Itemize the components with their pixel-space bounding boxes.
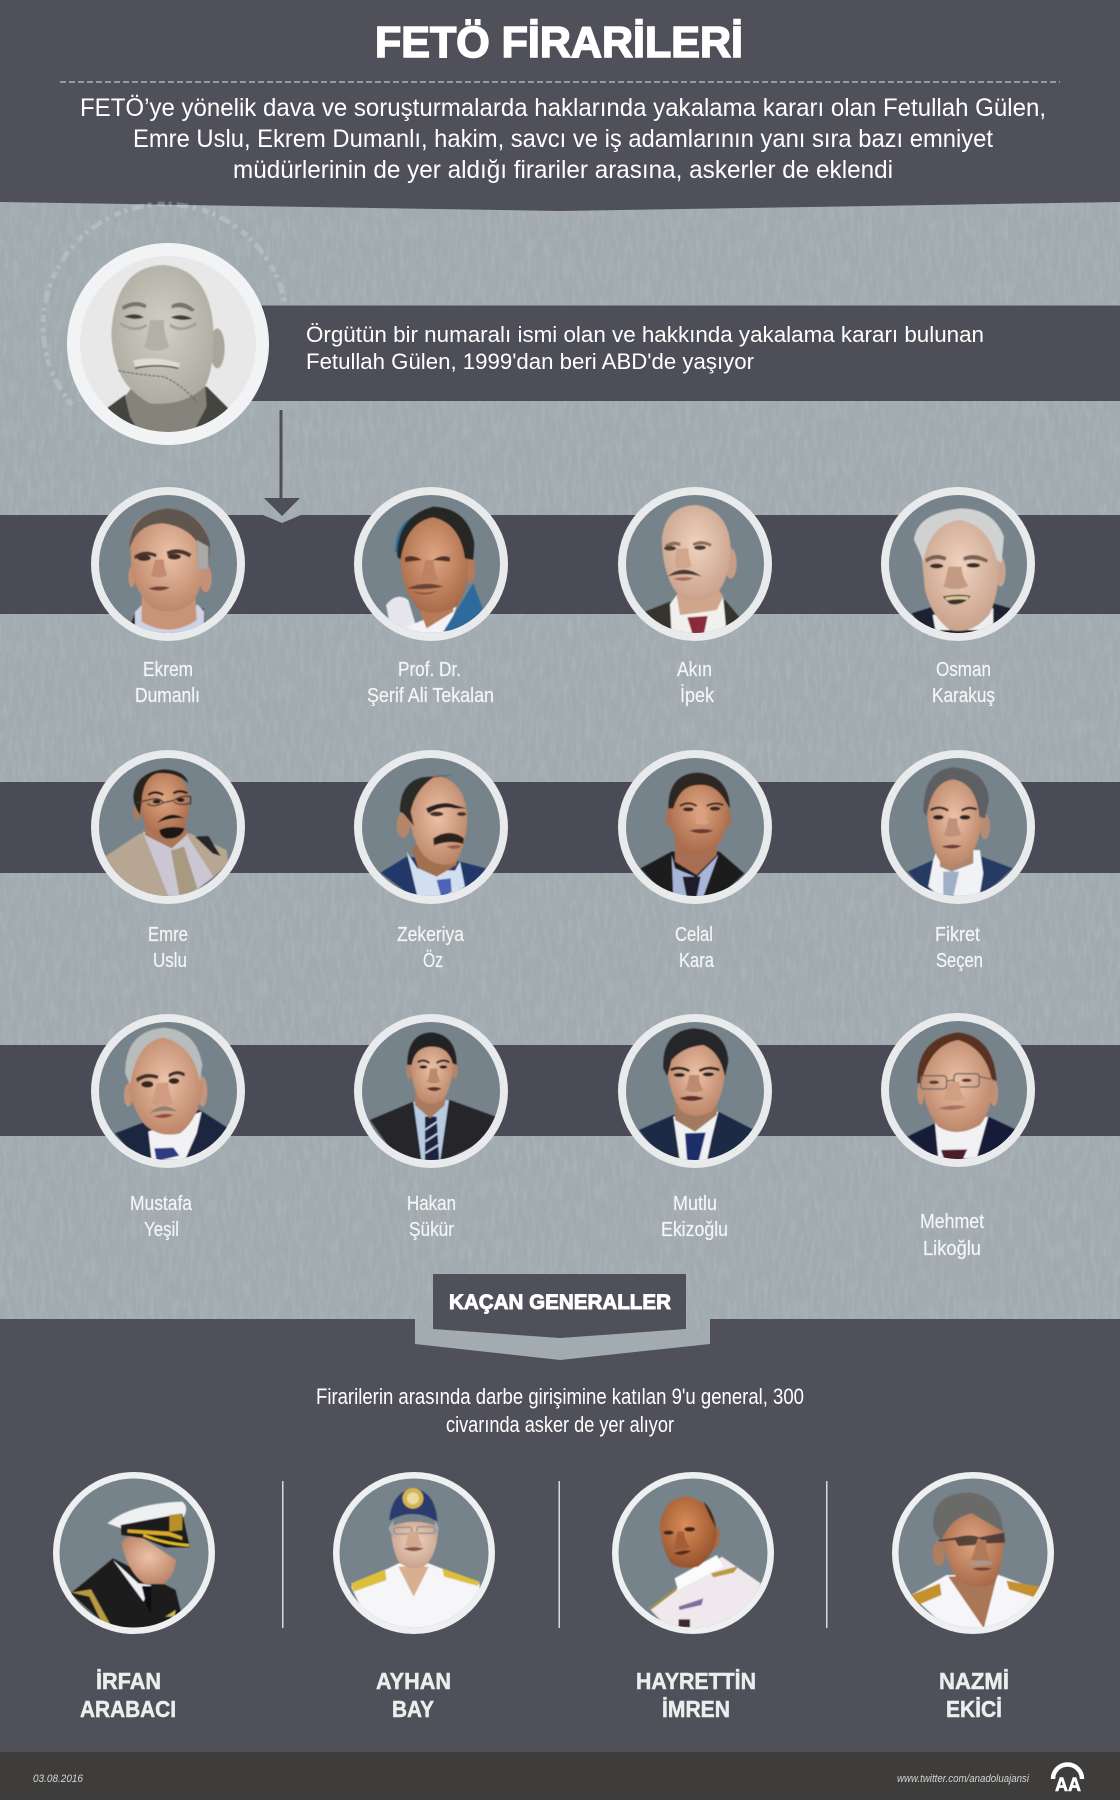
- names: row 2: Öz: [423, 950, 443, 972]
- footer link: www.twitter.com/anadoluajansi: [897, 1773, 1029, 1785]
- portrait: Fikret Seçen: [881, 750, 1035, 904]
- portrait: Mehmet Likoğlu: [881, 1013, 1035, 1167]
- general names: NAZMİ: [939, 1668, 1009, 1694]
- general names: İRFAN: [96, 1668, 161, 1694]
- icon: AA logo: AA: [1055, 1775, 1081, 1796]
- icon: AA logo: [1053, 1764, 1082, 1796]
- names: row 3: Mustafa: [130, 1193, 193, 1215]
- band: row 2: [0, 782, 1120, 873]
- names: row 3: Mehmet: [920, 1211, 984, 1233]
- intro text: müdürlerinin de yer aldığı firariler arasına, askerler de eklendi: [233, 156, 893, 184]
- band: row 1: [0, 515, 1120, 614]
- footer: [0, 1752, 1120, 1800]
- panel: Gülen band with text: [230, 306, 1120, 401]
- names: row 1: Osman: [936, 659, 991, 681]
- panel: header: [0, 0, 1120, 211]
- names: row 1: Ekrem: [143, 659, 193, 681]
- text: generals intro: Firarilerin arasında darbe girişimine katılan 9'u general, 300: [316, 1384, 804, 1409]
- portrait: Zekeriya Öz: [354, 750, 508, 904]
- names: row 3: Hakan: [407, 1193, 456, 1215]
- portrait: Mustafa Yeşil: [91, 1014, 245, 1168]
- panel: Gülen band with text: Fetullah Gülen, 1999'dan beri ABD'de yaşıyor: [306, 349, 754, 374]
- names: row 2: Zekeriya: [397, 924, 465, 946]
- portrait: Hakan Şükür: [354, 1014, 508, 1168]
- names: row 1: İpek: [680, 684, 715, 707]
- portrait: Mutlu Ekizoğlu: [618, 1014, 772, 1168]
- names: row 2: Emre: [148, 924, 188, 946]
- general names: İMREN: [662, 1696, 730, 1722]
- heading: Kaçan Generaller: KAÇAN GENERALLER: [449, 1291, 671, 1314]
- names: row 2: Kara: [679, 950, 715, 972]
- portrait: Ayhan Bay: [333, 1472, 495, 1634]
- general names: ARABACI: [80, 1696, 176, 1722]
- text: generals intro: [316, 1384, 804, 1437]
- arrow: [264, 410, 300, 516]
- title: FETÖ FİRARİLERİ: [375, 18, 743, 67]
- panel: textured grey background: [0, 195, 1120, 1330]
- names: row 1: Şerif Ali Tekalan: [367, 685, 494, 707]
- names: row 1: Prof. Dr.: [398, 659, 461, 681]
- names: row 1: [135, 659, 995, 707]
- names: row 2: Seçen: [936, 950, 983, 972]
- intro text: Emre Uslu, Ekrem Dumanlı, hakim, savcı ve iş adamlarının yanı sıra bazı emniyet: [133, 125, 993, 153]
- names: row 3: Mutlu: [673, 1193, 717, 1215]
- portrait: Celal Kara: [618, 750, 772, 904]
- names: row 1: Karakuş: [932, 685, 995, 707]
- intro text: [80, 94, 1046, 184]
- portrait: Nazmi Ekici: [892, 1472, 1054, 1634]
- names: row 2: Fikret: [935, 924, 980, 946]
- names: row 3: Yeşil: [144, 1219, 179, 1241]
- band: row 3: [0, 1045, 1120, 1136]
- names: row 1: Akın: [677, 659, 712, 681]
- intro text: FETÖ’ye yönelik dava ve soruşturmalarda haklarında yakalama kararı olan Fetullah Gülen,: [80, 94, 1046, 122]
- footer date: 03.08.2016: [33, 1773, 84, 1785]
- portrait: Osman Karakuş: [881, 487, 1035, 641]
- general names: EKİCİ: [946, 1696, 1002, 1722]
- portrait: Emre Uslu: [91, 750, 245, 904]
- names: row 3: Şükür: [409, 1219, 454, 1241]
- panel: Gülen band with text: Örgütün bir numaralı ismi olan ve hakkında yakalama kararı bulunan: [306, 322, 984, 347]
- general names: AYHAN: [376, 1668, 451, 1694]
- names: row 2: Uslu: [153, 950, 187, 972]
- names: row 2: [148, 924, 983, 972]
- names: row 1: Dumanlı: [135, 685, 200, 707]
- general names: HAYRETTİN: [636, 1668, 756, 1694]
- heading: Kaçan Generaller: [433, 1274, 686, 1338]
- portrait: İrfan Arabacı: [53, 1472, 215, 1634]
- portrait: Fetullah Gülen: [67, 243, 269, 445]
- names: row 2: Celal: [675, 924, 713, 946]
- general names: [80, 1668, 1009, 1722]
- portrait: Hayrettin İmren: [612, 1472, 774, 1634]
- names: row 3: [130, 1193, 984, 1260]
- names: row 3: Likoğlu: [923, 1238, 981, 1260]
- names: row 3: Ekizoğlu: [661, 1219, 728, 1241]
- dividers: [282, 1481, 828, 1628]
- decorative dashed ring: [43, 204, 287, 405]
- portrait: Akın İpek: [618, 487, 772, 641]
- portrait: Şerif Ali Tekalan: [354, 487, 508, 641]
- portrait: Ekrem Dumanlı: [91, 487, 245, 641]
- panel: generals section background: [0, 1319, 1120, 1752]
- text: generals intro: civarında asker de yer alıyor: [446, 1412, 674, 1437]
- general names: BAY: [392, 1696, 434, 1722]
